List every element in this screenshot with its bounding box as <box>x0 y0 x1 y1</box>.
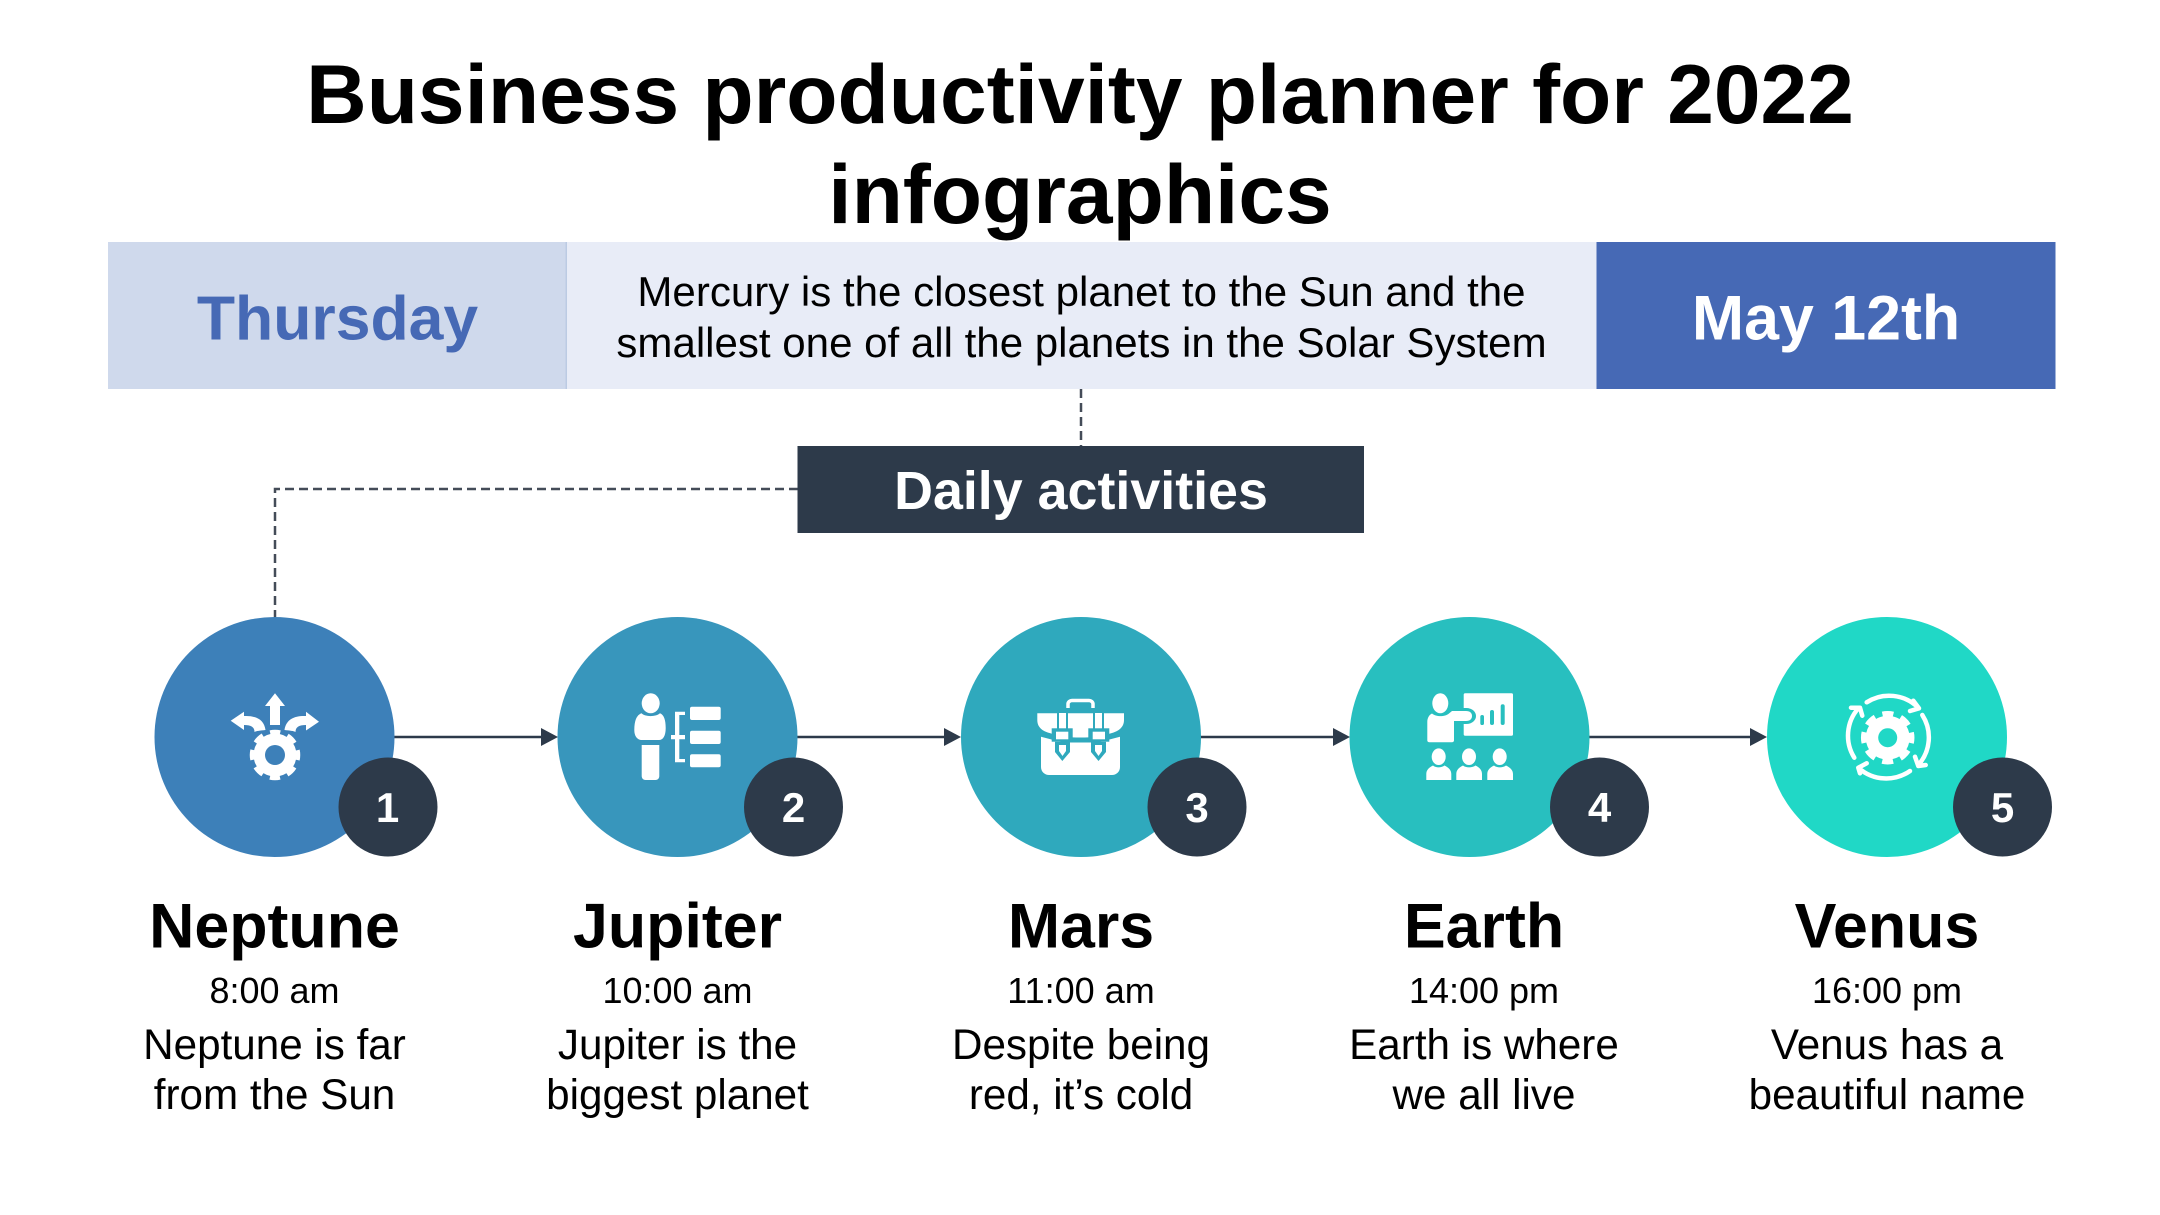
label: Mars <box>952 892 1210 1118</box>
panel: day: Thursday <box>197 284 478 354</box>
label: Neptune <box>143 892 406 1118</box>
label: Jupiter: 10:00 am <box>602 970 753 1011</box>
step 2: Jupiter <box>546 617 843 1118</box>
icon: person with list <box>634 693 721 780</box>
title: infographics <box>828 147 1332 241</box>
panel: description: smallest one of all the planets in the Solar System <box>616 319 1547 366</box>
badge 2: 2 <box>782 784 805 831</box>
label: Earth: 14:00 pm <box>1409 970 1559 1011</box>
label: Earth: Earth <box>1404 892 1564 962</box>
arrow 1 to 2 <box>394 728 558 746</box>
step 4: Earth <box>1349 617 1649 1118</box>
badge 3: 3 <box>1185 784 1209 831</box>
label: Earth <box>1349 892 1619 1118</box>
strap: left <box>1052 712 1073 761</box>
panel: daily activities heading: Daily activities <box>894 461 1268 521</box>
label: Mars: Despite being <box>952 1021 1210 1068</box>
label: Jupiter: Jupiter <box>573 892 782 962</box>
strap: right <box>1088 712 1109 761</box>
circle 2 <box>558 617 798 857</box>
circle 1 <box>154 617 394 857</box>
title: Business productivity planner for 2022 <box>306 47 1854 141</box>
label: Earth: Earth is where <box>1349 1021 1619 1068</box>
badge 4 <box>1550 758 1649 856</box>
connector: banner to daily activities <box>1080 389 1082 446</box>
icon: presenter with audience <box>1426 693 1513 780</box>
label: Jupiter: biggest planet <box>546 1071 809 1118</box>
badge 3 <box>1148 758 1246 856</box>
badge 5: 5 <box>1991 784 2014 831</box>
arrow 2 to 3 <box>797 728 961 746</box>
title <box>306 47 1854 241</box>
step 1: Neptune <box>143 617 438 1118</box>
badge 4: 4 <box>1588 784 1612 831</box>
label: Jupiter: Jupiter is the <box>558 1021 797 1068</box>
connector: daily activities to first circle <box>275 489 798 617</box>
label: Mars: 11:00 am <box>1007 970 1155 1011</box>
label: Neptune: from the Sun <box>154 1071 395 1118</box>
arrow 4 to 5 <box>1589 728 1767 746</box>
label: Venus: beautiful name <box>1749 1071 2025 1118</box>
label: Venus: 16:00 pm <box>1812 970 1962 1011</box>
panel: date banner <box>108 242 2056 389</box>
label: Neptune: Neptune is far <box>143 1021 406 1068</box>
panel: description <box>567 242 1597 389</box>
label: Venus <box>1749 892 2025 1118</box>
label: Neptune: Neptune <box>149 892 400 962</box>
arrow 3 to 4 <box>1200 728 1350 746</box>
panel: description: Mercury is the closest planet to the Sun and the <box>637 268 1526 315</box>
circle 4 <box>1350 617 1590 857</box>
icon: gear with rotating arrows <box>1848 696 1929 778</box>
label: Mars: red, it’s cold <box>969 1071 1193 1118</box>
label: Venus: Venus has a <box>1771 1021 2004 1068</box>
panel: day <box>108 242 567 389</box>
label: Neptune: 8:00 am <box>209 970 340 1011</box>
panel: date: May 12th <box>1692 284 1960 354</box>
step 5: Venus <box>1749 617 2052 1118</box>
circle 3 <box>961 617 1201 857</box>
panel: daily activities heading <box>798 446 1364 533</box>
label: Jupiter <box>546 892 809 1118</box>
icon: briefcase <box>1037 700 1124 775</box>
label: Mars: Mars <box>1008 892 1154 962</box>
badge 5 <box>1953 758 2052 856</box>
icon: gear with three arrows <box>231 693 319 778</box>
panel: date <box>1596 242 2056 389</box>
badge 1 <box>338 758 438 856</box>
step 3: Mars <box>952 617 1246 1118</box>
label: Earth: we all live <box>1392 1071 1575 1118</box>
badge 1: 1 <box>376 784 399 831</box>
circle 5 <box>1767 617 2007 857</box>
label: Venus: Venus <box>1795 892 1979 962</box>
badge 2 <box>744 758 843 856</box>
